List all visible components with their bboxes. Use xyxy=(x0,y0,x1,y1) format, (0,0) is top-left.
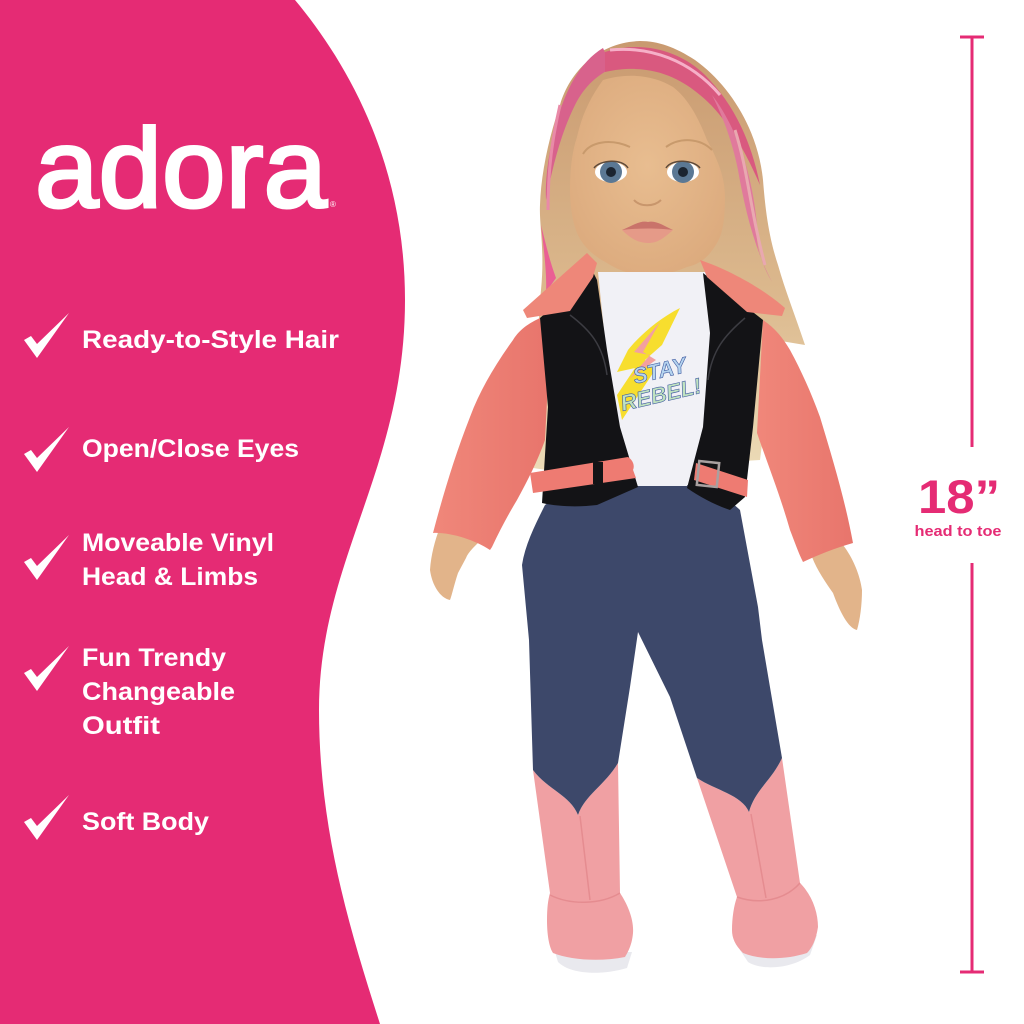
belt xyxy=(530,457,748,497)
left arm xyxy=(430,318,548,600)
feature: open/close eyes xyxy=(24,427,299,472)
left hand xyxy=(430,524,484,600)
feature: fun trendy changeable outfit: Fun Trendy xyxy=(82,644,226,672)
feature: ready-to-style hair xyxy=(24,313,339,358)
feature: ready-to-style hair: Ready-to-Style Hair xyxy=(82,326,339,354)
feature: fun trendy changeable outfit: Changeable xyxy=(82,678,235,706)
hair xyxy=(533,41,805,472)
left sleeve xyxy=(433,318,548,550)
feature: fun trendy changeable outfit: Outfit xyxy=(82,712,161,740)
mouth xyxy=(622,222,673,243)
right arm xyxy=(757,320,862,630)
right hand xyxy=(812,545,862,630)
t-shirt xyxy=(598,272,712,486)
eyes xyxy=(594,161,700,183)
feature: fun trendy changeable outfit xyxy=(24,644,235,740)
collar xyxy=(523,253,785,318)
feature: moveable vinyl head and limbs xyxy=(24,529,274,591)
right sleeve xyxy=(757,320,853,562)
nose xyxy=(634,200,661,205)
feature: moveable vinyl head and limbs: Head & Limbs xyxy=(82,563,258,591)
height scale: 18 inches: 18” xyxy=(918,470,1000,523)
shirt graphic: REBEL! xyxy=(618,373,704,416)
soles xyxy=(555,935,817,973)
feature: soft body xyxy=(24,795,209,840)
jeans xyxy=(522,485,782,815)
logo: adora: ® xyxy=(330,200,336,209)
boots xyxy=(533,758,818,973)
feature: open/close eyes: Open/Close Eyes xyxy=(82,435,299,463)
vest xyxy=(540,272,763,510)
shirt graphic xyxy=(617,308,704,420)
logo: adora: adora xyxy=(35,106,328,231)
feature: soft body: Soft Body xyxy=(82,808,209,836)
panel: pink wave background xyxy=(0,0,405,1024)
height scale: 18 inches: head to toe xyxy=(914,524,1002,540)
feature list xyxy=(24,313,339,840)
feature: moveable vinyl head and limbs: Moveable Vinyl xyxy=(82,529,274,557)
illustration: doll xyxy=(430,41,862,973)
height scale: 18 inches xyxy=(914,37,1002,972)
shirt graphic: STAY xyxy=(631,352,691,389)
face xyxy=(570,76,725,275)
